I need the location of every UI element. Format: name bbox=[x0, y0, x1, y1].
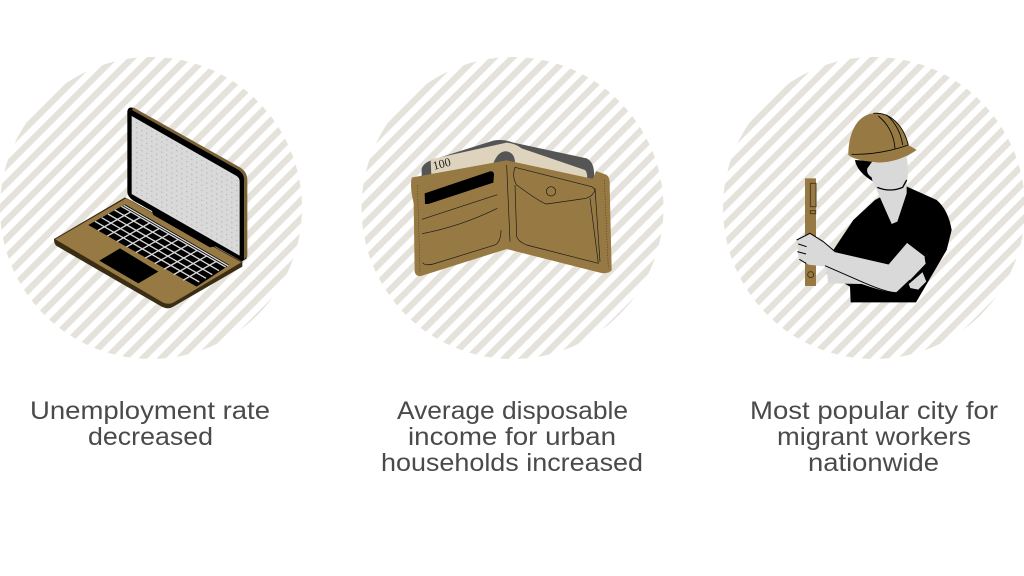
face and neck bbox=[867, 157, 908, 224]
lower hand bbox=[908, 272, 927, 290]
hard hat bbox=[848, 113, 917, 162]
label: migrant workers: Most popular city for bbox=[750, 397, 998, 425]
icon: wallet bbox=[412, 140, 611, 275]
circle: laptop background bbox=[0, 57, 302, 359]
label: unemployment: Unemployment rate bbox=[30, 397, 270, 425]
label: disposable income: Average disposable bbox=[397, 397, 628, 425]
label: disposable income bbox=[381, 397, 643, 477]
circle: worker background bbox=[723, 57, 1024, 359]
shirt bbox=[827, 185, 952, 302]
label: migrant workers: migrant workers bbox=[777, 423, 971, 451]
label: disposable income: households increased bbox=[381, 449, 643, 477]
circle: wallet background bbox=[362, 57, 664, 359]
keyboard bbox=[88, 204, 229, 287]
label: unemployment: decreased bbox=[88, 423, 213, 451]
arms bbox=[797, 233, 926, 293]
icon: laptop bbox=[54, 107, 247, 308]
icon: construction worker bbox=[797, 113, 952, 302]
label: disposable income: income for urban bbox=[408, 423, 616, 451]
level tool bbox=[805, 178, 816, 286]
money label: 100 bbox=[431, 155, 452, 173]
label: unemployment bbox=[30, 397, 270, 451]
hair bbox=[855, 160, 878, 182]
trackpad bbox=[99, 248, 158, 283]
label: migrant workers bbox=[750, 397, 998, 477]
label: migrant workers: nationwide bbox=[808, 449, 939, 477]
